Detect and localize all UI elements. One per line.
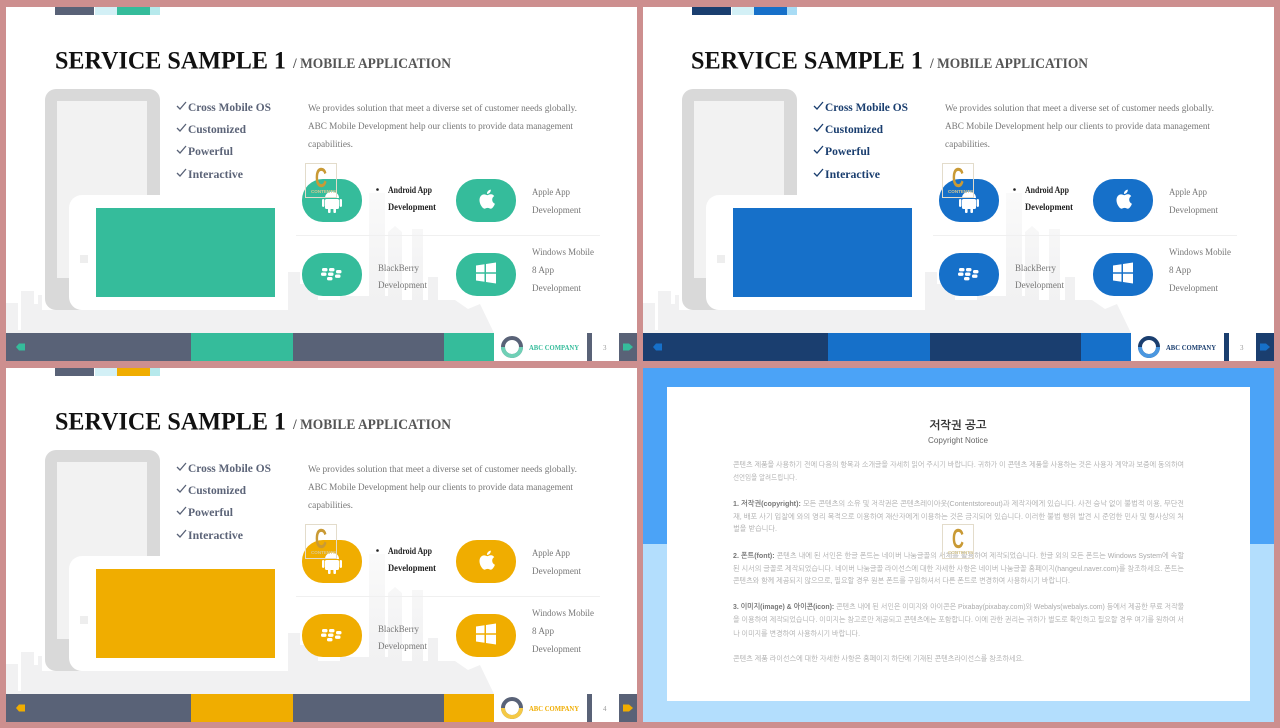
description: ABC Mobile Development help our clients to provide data management xyxy=(945,122,1210,132)
notice clause 3: 나 이미지를 변경하여 사용하시기 바랍니다. xyxy=(733,629,860,638)
feature checklist: Powerful xyxy=(188,507,233,519)
phone mockup: portrait xyxy=(45,450,160,671)
description: capabilities. xyxy=(308,501,353,511)
service: apple: Development xyxy=(1169,206,1218,216)
service: windows: 8 App xyxy=(532,627,554,637)
notice clause 1 xyxy=(733,499,1184,533)
footer bar: 3 xyxy=(603,344,607,352)
service: blackberry: Development xyxy=(378,642,427,652)
title: SERVICE SAMPLE 1 xyxy=(55,46,286,74)
service: windows: Windows Mobile xyxy=(532,248,594,258)
service: android xyxy=(302,540,437,583)
feature checklist: Powerful xyxy=(188,146,233,158)
watermark xyxy=(942,523,974,558)
watermark xyxy=(942,162,974,198)
feature checklist xyxy=(814,102,908,181)
service: android xyxy=(939,179,1074,222)
feature checklist: Cross Mobile OS xyxy=(188,463,271,475)
footer bar: ABC COMPANY xyxy=(529,343,580,352)
title: SERVICE SAMPLE 1 xyxy=(691,46,923,74)
service: apple xyxy=(456,540,581,583)
footer bar xyxy=(643,333,1274,361)
feature checklist: Powerful xyxy=(825,146,870,158)
skyline background xyxy=(6,193,494,333)
top colour tabs xyxy=(55,7,160,15)
panel: copyright notice xyxy=(643,368,1274,722)
service: windows xyxy=(456,248,594,296)
phone mockup: landscape xyxy=(69,556,288,671)
subtitle: / MOBILE APPLICATION xyxy=(292,417,451,433)
service: blackberry: BlackBerry xyxy=(378,625,419,635)
footer bar: 3 xyxy=(1240,344,1244,352)
service: android: Development xyxy=(388,564,437,574)
panel: blue service slide xyxy=(643,7,1274,361)
notice clause 1: 벌을 받습니다. xyxy=(733,524,777,533)
description: We provides solution that meet a diverse set of customer needs globally. xyxy=(308,464,577,475)
feature checklist: Interactive xyxy=(188,169,243,181)
notice heading: 저작권 공고 xyxy=(929,419,987,432)
description xyxy=(945,103,1214,150)
notice clause 3 xyxy=(733,602,1184,638)
feature checklist: Interactive xyxy=(825,169,880,181)
footer bar: 4 xyxy=(603,705,607,713)
feature checklist: Customized xyxy=(188,485,247,497)
phone mockup: landscape xyxy=(69,195,288,310)
footer bar: ABC COMPANY xyxy=(529,704,580,713)
feature checklist: Cross Mobile OS xyxy=(825,102,908,114)
service: android: Android App xyxy=(388,547,432,557)
service: apple: Apple App xyxy=(532,188,570,198)
notice clause 2: 콘텐츠와 함께 제공되지 않으므로, 필요할 경우 원본 폰트를 구입하셔서 다른 폰트로 변경하여 사용하시기 바랍니다. xyxy=(733,576,1070,585)
feature checklist: Customized xyxy=(825,124,884,136)
phone mockup: landscape xyxy=(706,195,925,310)
notice closing line: 콘텐츠 제품 라이선스에 대한 자세한 사항은 홈페이지 하단에 기재된 콘텐츠라이선스를 참조하세요. xyxy=(733,654,1024,663)
feature checklist: Interactive xyxy=(188,530,243,542)
service: windows: 8 App xyxy=(532,266,554,276)
feature checklist: Cross Mobile OS xyxy=(188,102,271,114)
service: windows: Windows Mobile xyxy=(532,609,594,619)
description: We provides solution that meet a diverse set of customer needs globally. xyxy=(945,103,1214,114)
service: apple: Apple App xyxy=(1169,188,1207,198)
phone mockup: portrait xyxy=(45,89,160,310)
service: blackberry: BlackBerry xyxy=(378,264,419,274)
notice clause 2 xyxy=(733,551,1184,585)
service: blackberry xyxy=(302,614,427,657)
notice intro: 콘텐츠 제품을 사용하기 전에 다음의 항목과 소개글을 자세히 읽어 주시기 바랍니다. 귀하가 이 콘텐츠 제품을 사용하는 것은 사용자 계약과 보증에 동의하여 xyxy=(733,460,1184,469)
footer bar: ABC COMPANY xyxy=(1166,343,1217,352)
skyline background xyxy=(6,554,494,694)
service: apple: Development xyxy=(532,567,581,577)
notice intro xyxy=(733,460,1184,482)
description: ABC Mobile Development help our clients to provide data management xyxy=(308,483,573,493)
feature checklist: Customized xyxy=(188,124,247,136)
footer bar xyxy=(6,694,637,722)
feature checklist xyxy=(177,102,271,181)
notice clause 2: 2. 폰트(font): 콘텐츠 내에 된 서인은 한글 폰트는 네이버 나눔글꼴의 서체를 활용하여 제작되었습니다. 한글 외의 모든 폰트는 Windows System에 속할 xyxy=(733,551,1184,560)
notice clause 3: 3. 이미지(image) & 아이콘(icon): 콘텐츠 내에 된 서인은 이미지와 아이콘은 Pixabay(pixabay.com)와 Webalys(webalys.com) 등에서 제공한 무료 저작물 xyxy=(733,602,1184,611)
description: capabilities. xyxy=(308,140,353,150)
top colour tabs xyxy=(55,368,160,376)
service: apple xyxy=(456,179,581,222)
service: blackberry: BlackBerry xyxy=(1015,264,1056,274)
service: android xyxy=(302,179,437,222)
description xyxy=(308,103,577,150)
feature checklist xyxy=(177,463,271,542)
service: blackberry: Development xyxy=(1015,281,1064,291)
notice clause 3: 을 이용하여 제작되었습니다. 이미지는 참고로만 제공되고 콘텐츠에는 포함합니다. 이에 관한 권리는 귀하가 별도로 확인하고 필요할 경우 여기를 원하여 서 xyxy=(733,615,1184,624)
top colour tabs xyxy=(692,7,797,15)
skyline background xyxy=(643,193,1131,333)
watermark xyxy=(306,523,336,558)
notice clause 1: 1. 저작권(copyright): 모든 콘텐츠의 소유 및 저작권은 콘텐츠레이아웃(Contentstoreout)과 제작자에게 있습니다. 사전 승낙 없이 불법적 이용, 무단전 xyxy=(733,499,1184,508)
service: android: Android App xyxy=(1025,186,1069,196)
subtitle: / MOBILE APPLICATION xyxy=(929,56,1088,72)
service: apple xyxy=(1093,179,1218,222)
service: blackberry xyxy=(939,253,1064,296)
service: blackberry xyxy=(302,253,427,296)
description: capabilities. xyxy=(945,140,990,150)
description: ABC Mobile Development help our clients to provide data management xyxy=(308,122,573,132)
footer bar xyxy=(6,333,637,361)
notice subheading: Copyright Notice xyxy=(928,436,989,445)
service: windows: Development xyxy=(532,645,581,655)
service: apple: Apple App xyxy=(532,549,570,559)
service: android: Development xyxy=(1025,203,1074,213)
service: windows: Windows Mobile xyxy=(1169,248,1231,258)
service: blackberry: Development xyxy=(378,281,427,291)
service: windows xyxy=(456,609,594,657)
notice clause 2: 된 시서의 글꼴로 제작되었습니다. 네이버 나눔글꼴 라이선스에 대한 자세한 사항은 네이버 나눔글꼴 홈페이지(hangeul.naver.com)를 참조하세요. 폰트는 xyxy=(733,564,1184,573)
notice intro: 선언임을 알려드립니다. xyxy=(733,473,797,482)
title: SERVICE SAMPLE 1 xyxy=(55,406,286,436)
description: We provides solution that meet a diverse set of customer needs globally. xyxy=(308,103,577,114)
panel: teal service slide xyxy=(6,7,637,361)
service: windows: Development xyxy=(1169,284,1218,294)
service: windows xyxy=(1093,248,1231,296)
watermark xyxy=(306,162,336,198)
service: android: Android App xyxy=(388,186,432,196)
panel: yellow service slide xyxy=(6,368,637,722)
service: apple: Development xyxy=(532,206,581,216)
notice clause 1: 재, 배포 사기 입찰에 와의 영리 목적으로 이용하여 재산자에게 이용하는 것은 금지되어 있습니다. 이러한 불법 행위 발견 시 준엄한 민사 및 형사상의 처 xyxy=(733,512,1184,521)
service: windows: 8 App xyxy=(1169,266,1191,276)
subtitle: / MOBILE APPLICATION xyxy=(292,56,451,72)
service: windows: Development xyxy=(532,284,581,294)
service: android: Development xyxy=(388,203,437,213)
phone mockup: portrait xyxy=(682,89,797,310)
description xyxy=(308,464,577,511)
